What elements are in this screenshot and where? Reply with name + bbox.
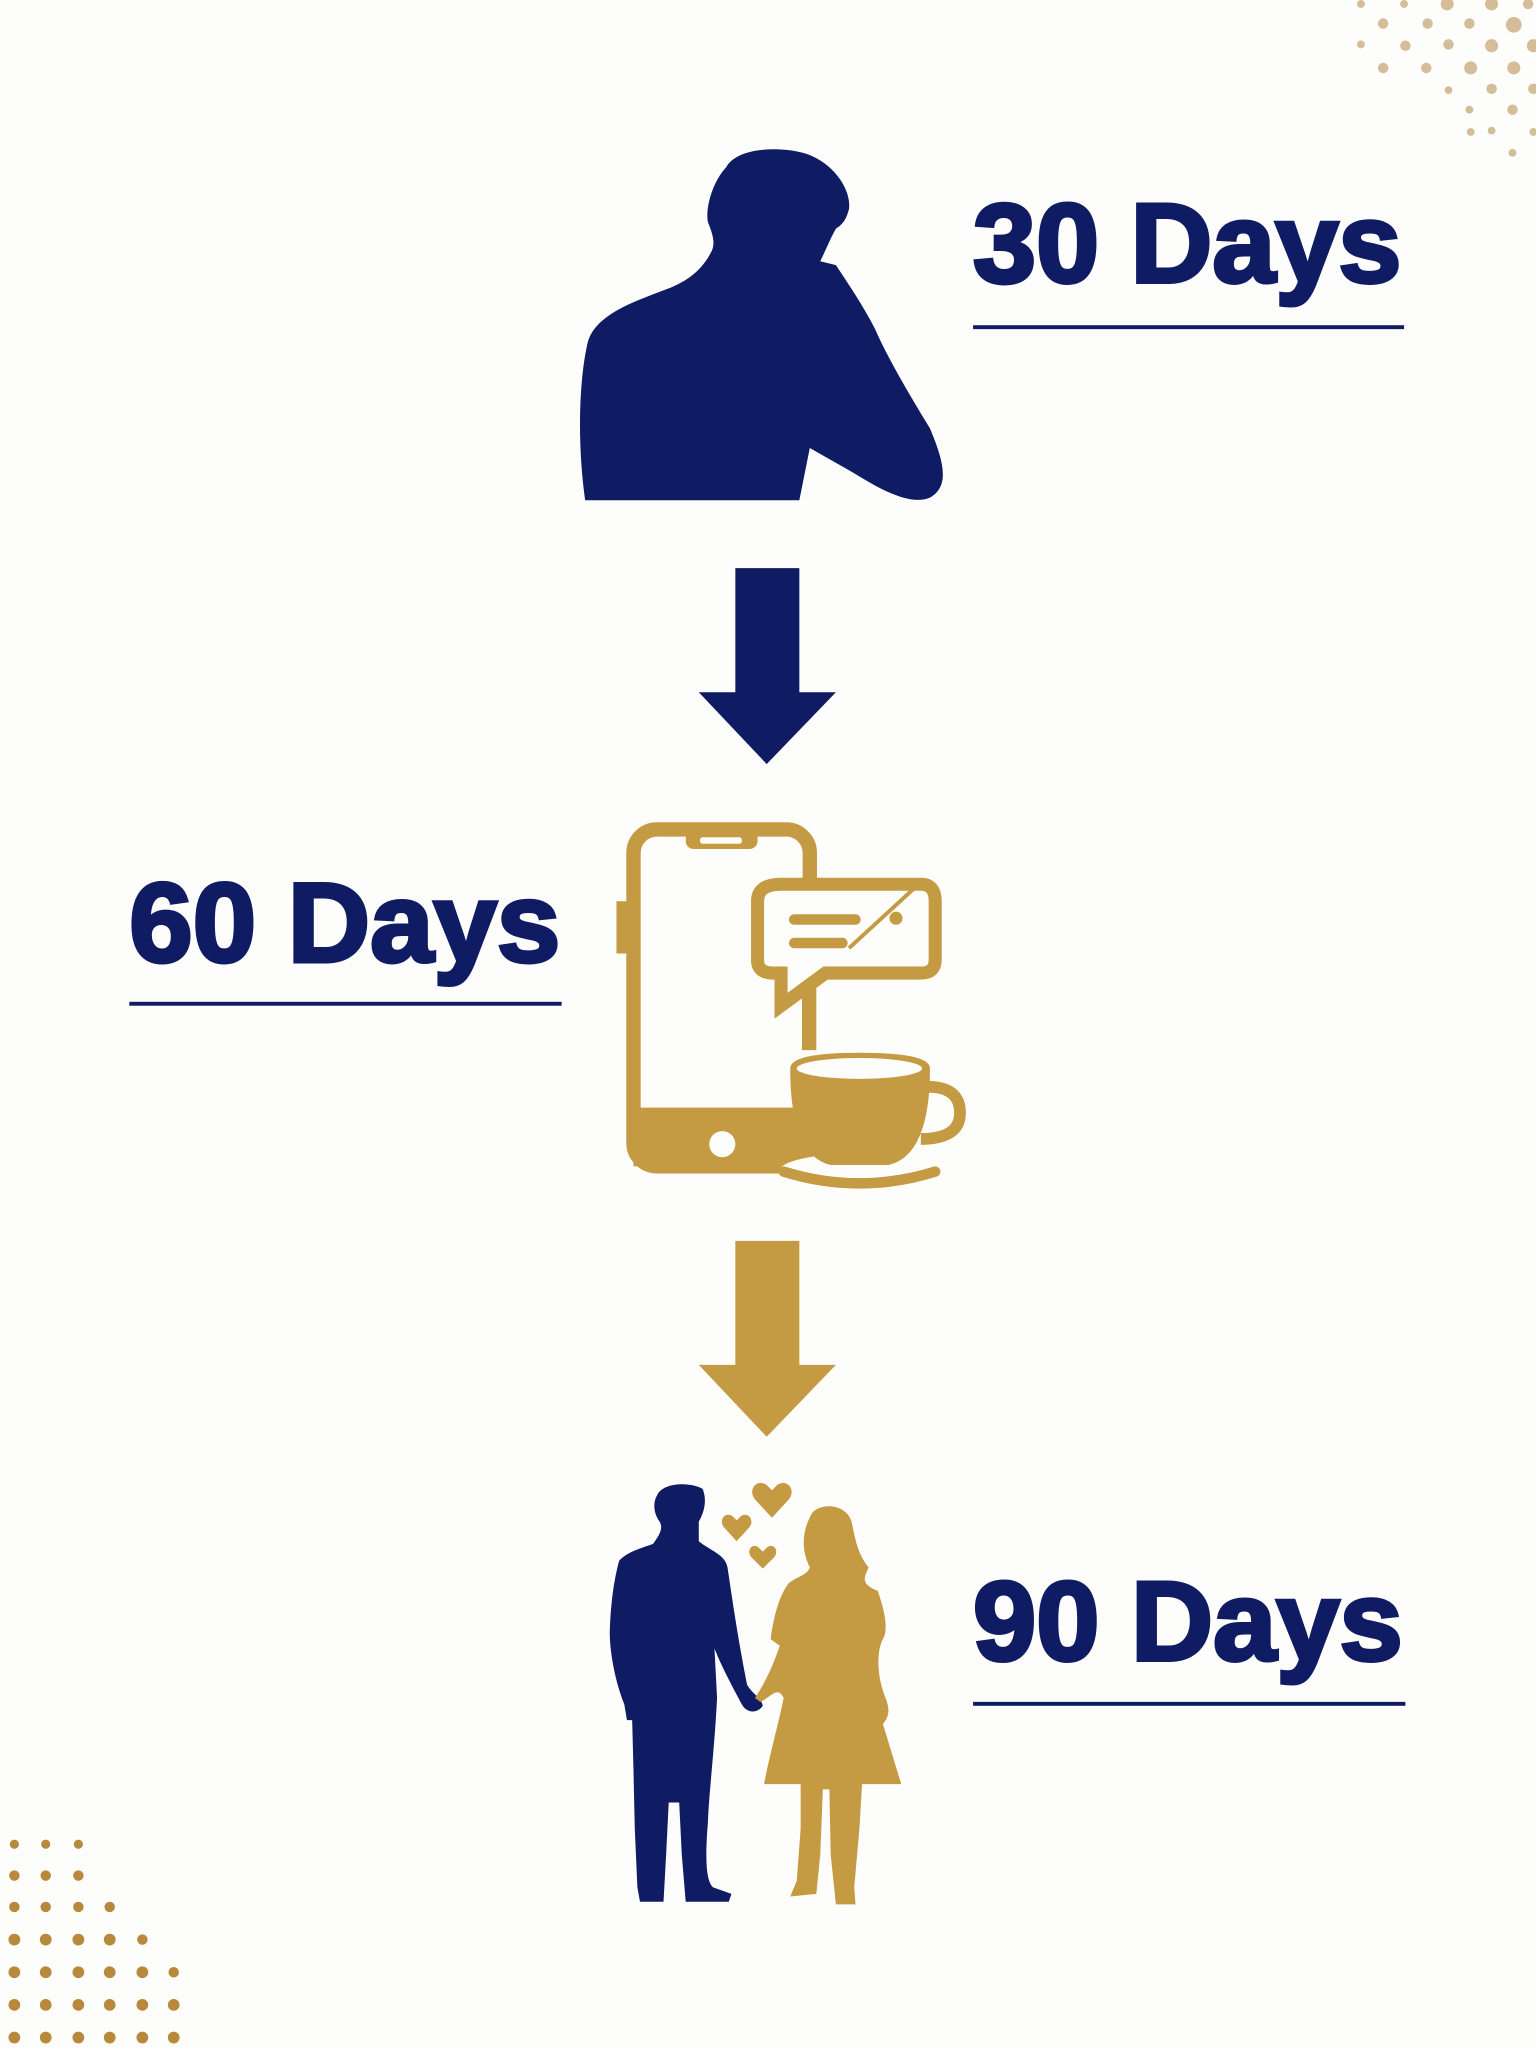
icon: thinking man	[580, 149, 943, 500]
title: 30 Days: 30 Days	[973, 180, 1401, 306]
title: 60 Days: 60 Days	[129, 859, 560, 985]
icon: hearts	[722, 1483, 792, 1569]
arrow: gold down	[699, 1241, 836, 1437]
icon: couple holding hands with hearts	[610, 1483, 901, 1904]
decoration: bottom-left dots	[8, 1840, 180, 2043]
decoration: top-right dots	[1357, 0, 1536, 157]
title: 90 Days: 90 Days	[973, 1558, 1403, 1684]
icon: phone with chat and coffee	[616, 829, 960, 1190]
arrow: navy down	[699, 568, 836, 764]
